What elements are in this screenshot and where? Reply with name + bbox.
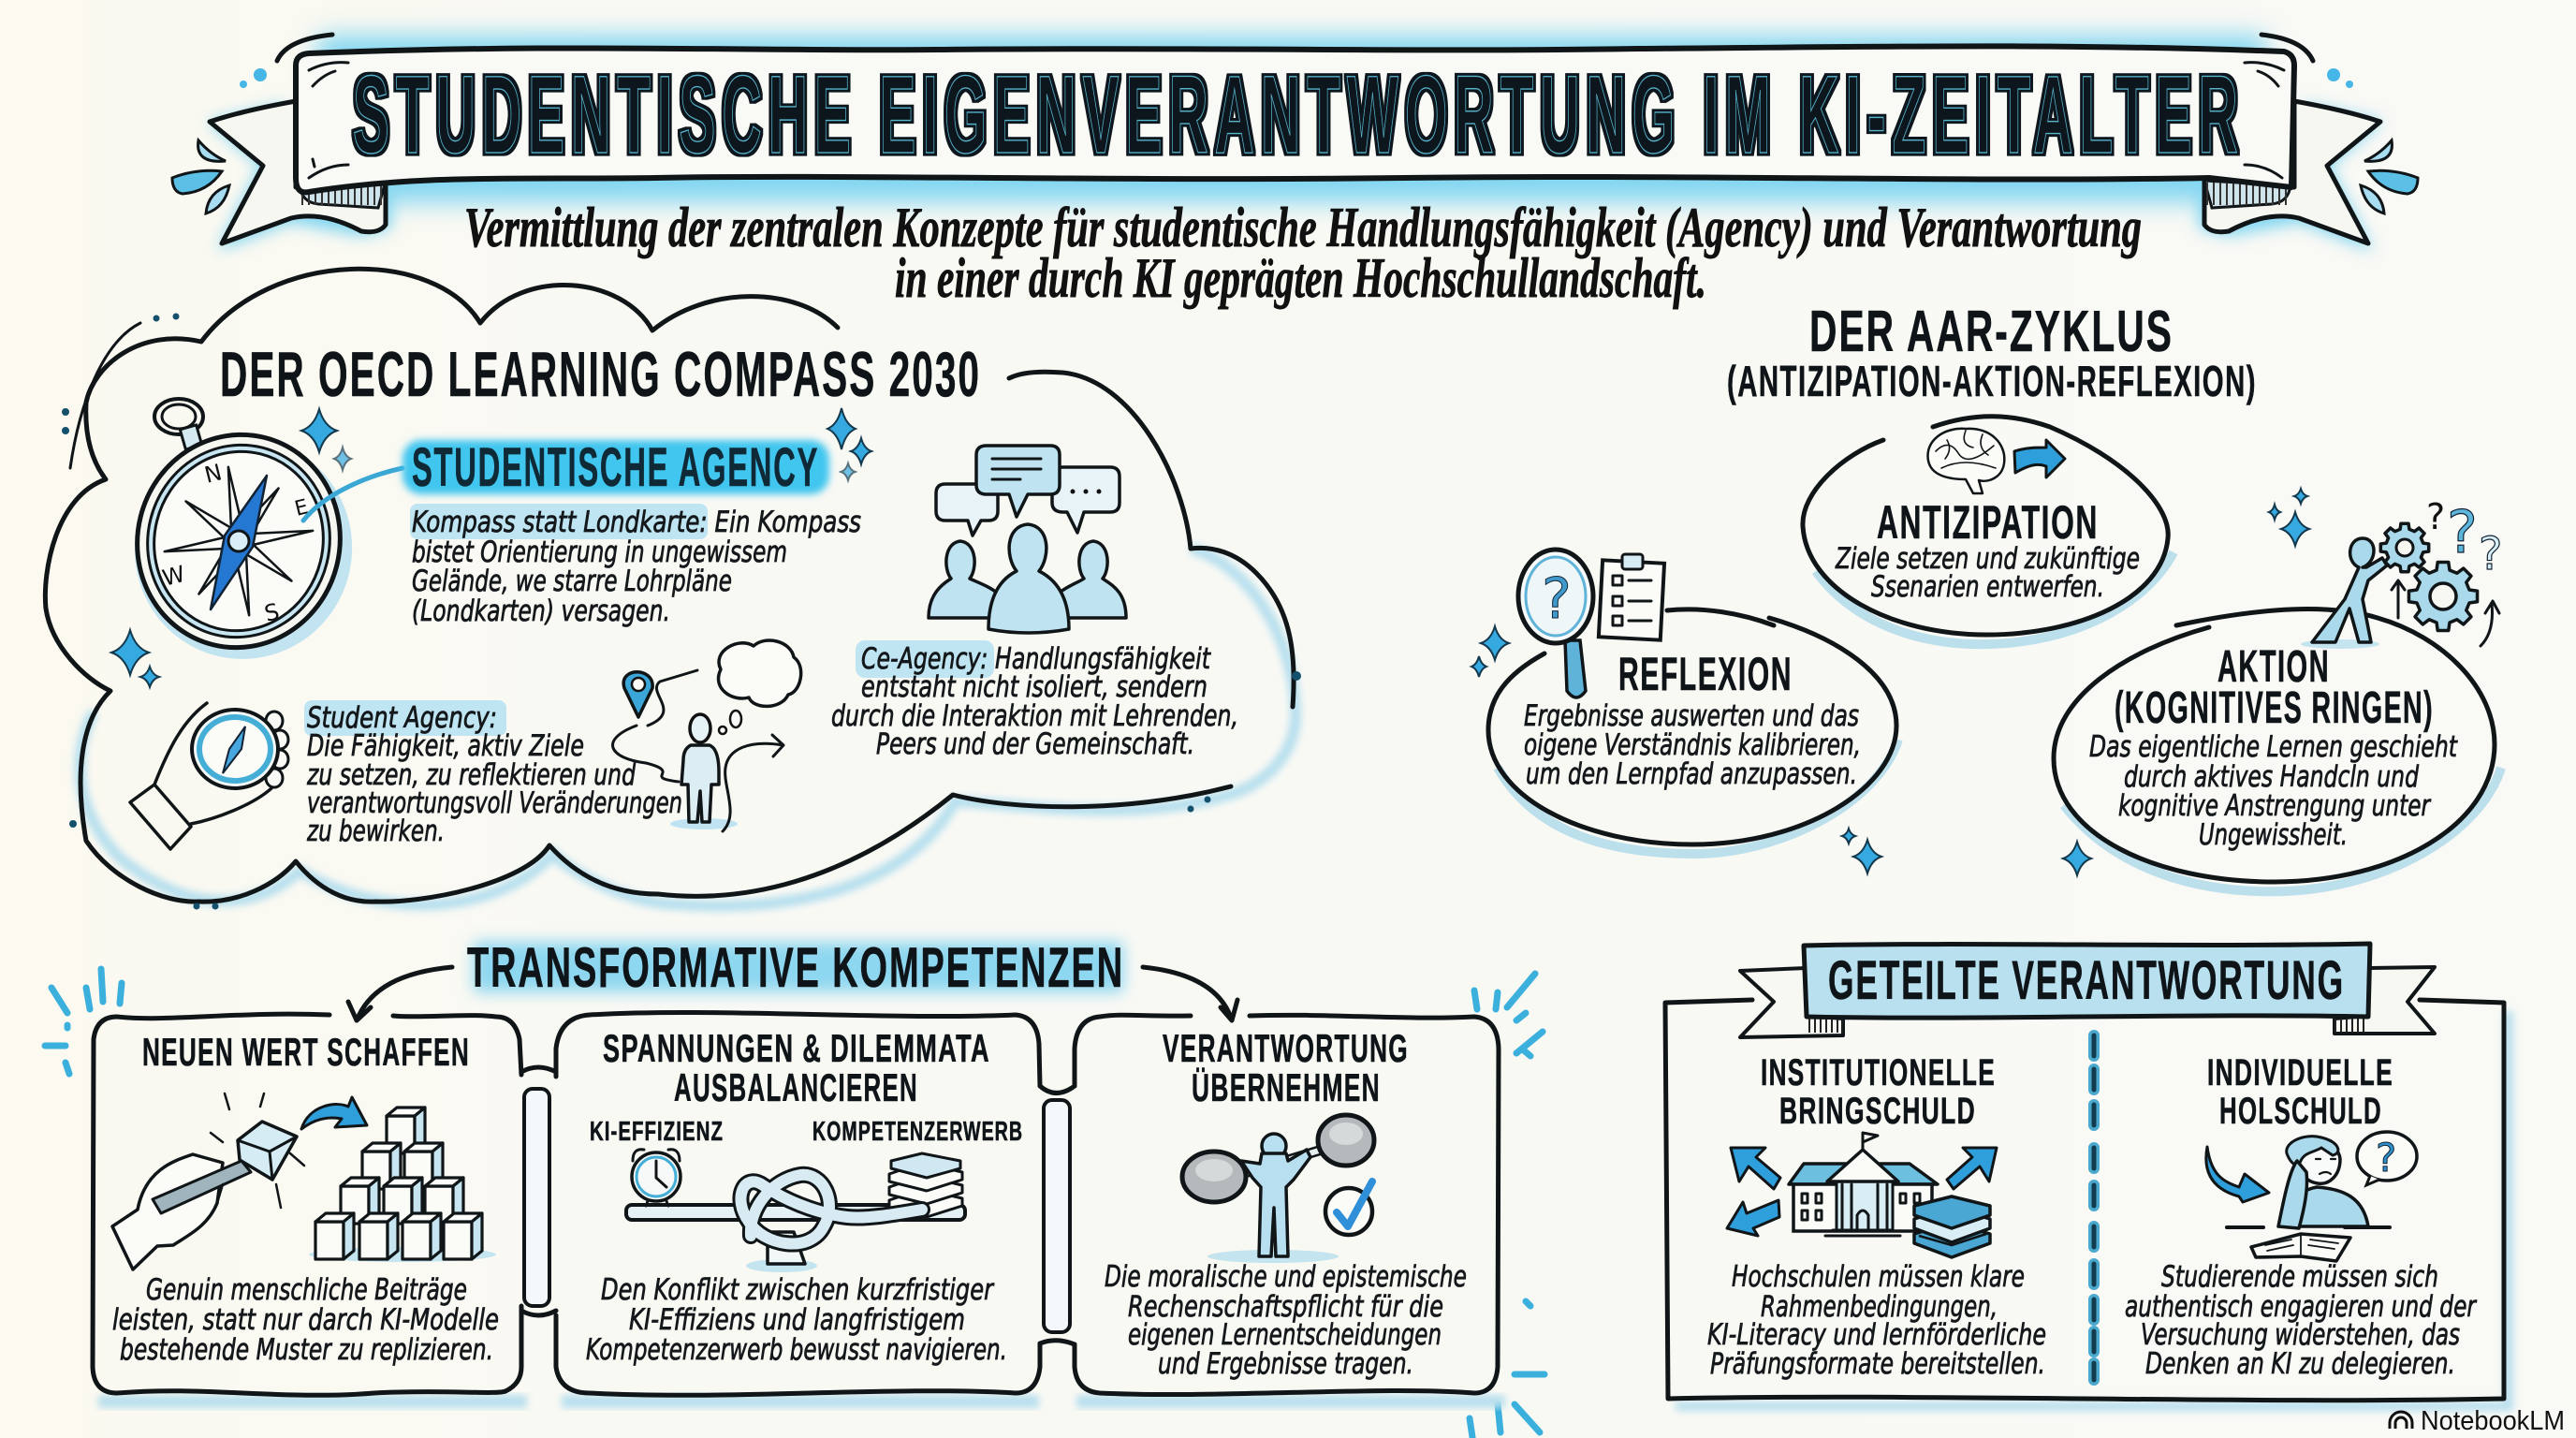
arrow: to first competence: [348, 967, 452, 1020]
text: Kompass statt Landkarte: (Londkarten) versagen.: [412, 594, 670, 628]
node: Aktion: AKTION: [2217, 642, 2330, 692]
column: Bringschuld: BRINGSCHULD: [1779, 1091, 1976, 1132]
text: Student Agency: zu bewirken.: [306, 814, 445, 848]
node: Reflexion: um den Lernpfad anzupassen.: [1526, 757, 1857, 791]
decorative dots: [62, 313, 1301, 910]
text: Kompass statt Landkarte: Kompass statt Londkarte: Ein Kompass: [412, 506, 861, 539]
column: Bringschuld: Präfungsformate bereitstellen.: [1710, 1347, 2045, 1381]
card: Verantwortung übernehmen: Die moralische und epistemische: [1105, 1260, 1467, 1294]
panel: shared responsibility: [1665, 944, 2509, 1406]
node: Antizipation: [1803, 417, 2174, 644]
icon: scale with knot, clock and books: [626, 1150, 965, 1272]
card: Verantwortung übernehmen: VERANTWORTUNG: [1163, 1026, 1409, 1070]
icon: figure pushing gears: ?: [2479, 528, 2502, 580]
column: Holschuld: Denken an KI zu delegieren.: [2145, 1347, 2455, 1381]
icon: person with pin and thought cloud: [613, 640, 801, 831]
banner fold strokes: [309, 63, 2284, 178]
icon: hand, cube and stacked blocks: [112, 1093, 496, 1269]
icon: brain with arrow: [1928, 429, 2065, 493]
icon: figure pushing gears: ?: [2447, 498, 2478, 566]
icon: compass: N: [202, 459, 225, 489]
subtitle: [464, 197, 2142, 309]
heading: transformative: TRANSFORMATIVE KOMPETENZEN: [467, 936, 1124, 999]
text: Kompass statt Landkarte: Gelände, we starre Lohrpläne: [412, 565, 732, 598]
text: Kompass statt Landkarte: [410, 504, 861, 628]
card: Spannungen und Dilemmata: [521, 1012, 1075, 1408]
heading: AAR cycle: DER AAR-ZYKLUS: [1809, 300, 2174, 364]
card: neuen Wert schaffen: leisten, statt nur darch KI-Modelle: [112, 1303, 499, 1337]
cloud outline: [45, 269, 1231, 902]
icon: university with arrows and books: [1727, 1133, 1997, 1257]
node: Aktion: [2054, 496, 2502, 891]
column: Bringschuld: [1707, 1052, 2046, 1381]
node: Aktion: kognitive Anstrengung unter: [2118, 789, 2432, 823]
icon: compass: [111, 399, 375, 682]
ribbon heading: [1740, 944, 2435, 1037]
sparkles around cycle: [1471, 489, 2309, 875]
text: Co-Agency: Ce-Agency: Handlungsfähigkeit: [861, 642, 1211, 676]
column: Bringschuld: INSTITUTIONELLE: [1761, 1052, 1996, 1093]
connector line to highlight: [303, 468, 402, 521]
node: Antizipation: Ziele setzen und zukünftige: [1835, 542, 2140, 576]
card: Verantwortung übernehmen: und Ergebnisse tragen.: [1158, 1347, 1413, 1381]
arrow: to third competence: [1143, 967, 1237, 1020]
title banner: [172, 35, 2418, 251]
icon: weightlifter and checkmark: [1182, 1115, 1374, 1263]
column: Holschuld: INDIVIDUELLE: [2207, 1052, 2393, 1093]
panel: AAR cycle: [1471, 300, 2502, 891]
highlight: Studentische Agency: [402, 437, 829, 498]
node: Aktion: Ungewissheit.: [2199, 818, 2348, 852]
card: Spannungen und Dilemmata: SPANNUNGEN & DILEMMATA: [603, 1026, 990, 1070]
divider: [2088, 1035, 2100, 1380]
text: Co-Agency: entstaht nicht isoliert, sendern: [861, 670, 1208, 704]
node: Reflexion: Ergebnisse auswerten und das: [1524, 699, 1859, 733]
node: Antizipation: ANTIZIPATION: [1877, 496, 2099, 549]
heading: AAR cycle: [1727, 300, 2257, 405]
icon: hand holding compass: [130, 703, 288, 849]
card: Spannungen und Dilemmata: KI-EFFIZIENZ: [590, 1117, 724, 1147]
tube connectors: [524, 1089, 1070, 1332]
icon: student reading: ?: [2376, 1135, 2396, 1181]
text: Co-Agency: [831, 640, 1238, 761]
node: Antizipation: Ssenarien entwerfen.: [1871, 570, 2104, 604]
card: Verantwortung übernehmen: eigenen Lernentscheidungen: [1128, 1318, 1442, 1352]
icon: compass: E: [292, 495, 311, 521]
card: Verantwortung übernehmen: [1075, 1015, 1505, 1408]
text: Kompass statt Landkarte: bistet Orientierung in ungewissem: [412, 536, 787, 569]
heading: OECD compass: DER OECD LEARNING COMPASS 2030: [220, 339, 981, 410]
node: Aktion: Das eigentliche Lernen geschieht: [2089, 730, 2458, 764]
column: Holschuld: [2125, 1052, 2478, 1381]
text: Student Agency: verantwortungsvoll Veränderungen: [307, 786, 682, 820]
right ribbon tail: [2204, 35, 2418, 243]
text: Student Agency: Die Fähigkeit, aktiv Ziele: [307, 729, 584, 763]
node: Reflexion: [1488, 550, 1898, 854]
cloud shadow: [80, 549, 1295, 906]
column: Holschuld: Versuchung widerstehen, das: [2141, 1318, 2460, 1352]
divider core: [2091, 1035, 2097, 1380]
column: Holschuld: Studierende müssen sich: [2161, 1260, 2438, 1294]
text: Student Agency: zu setzen, zu reflektieren und: [306, 758, 636, 792]
icon: student reading: [2206, 1132, 2417, 1261]
panel: OECD learning compass cloud: [45, 269, 1301, 909]
icon: mirror and clipboard: ?: [1542, 566, 1572, 632]
card: Spannungen und Dilemmata: KI-Effiziens und langfristigem: [629, 1303, 965, 1337]
card: Verantwortung übernehmen: ÜBERNEHMEN: [1192, 1065, 1381, 1109]
banner body: [296, 46, 2294, 192]
icon: figure pushing gears: ?: [2426, 496, 2445, 537]
heading: transformative: [467, 936, 1124, 999]
sparkles around compass: [111, 408, 871, 687]
card: Verantwortung übernehmen: Rechenschaftspflicht für die: [1128, 1290, 1443, 1324]
column: Bringschuld: Rahmenbedingungen,: [1761, 1290, 1998, 1324]
icon: compass: S: [262, 598, 282, 627]
card: neuen Wert schaffen: Genuin menschliche Beiträge: [146, 1273, 467, 1307]
left ribbon tail: [172, 35, 386, 243]
icon: co-agency group: [929, 446, 1126, 633]
icon: mirror and clipboard: [1518, 550, 1664, 697]
node: Aktion: durch aktives Handcln und: [2124, 760, 2419, 794]
burst marks: [45, 969, 1544, 1437]
card: neuen Wert schaffen: [93, 1014, 527, 1408]
text: Co-Agency: Peers und der Gemeinschaft.: [876, 727, 1194, 761]
text: Student Agency: Student Agency:: [307, 701, 497, 735]
node: Reflexion: REFLEXION: [1618, 648, 1793, 700]
NotebookLM watermark: NotebookLM: [2421, 1406, 2565, 1436]
column: Holschuld: HOLSCHULD: [2219, 1091, 2382, 1132]
text: Student Agency: [304, 700, 682, 848]
icon: compass: W: [160, 561, 187, 592]
card: Spannungen und Dilemmata: Den Konflikt zwischen kurzfristiger: [601, 1273, 995, 1307]
column: Bringschuld: KI-Literacy und lernförderliche: [1707, 1318, 2046, 1352]
card: neuen Wert schaffen: NEUEN WERT SCHAFFEN: [142, 1030, 470, 1074]
subtitle: in einer durch KI geprägten Hochschullandschaft.: [895, 247, 1706, 309]
panel: transformative competencies: [45, 936, 1544, 1437]
icon: figure pushing gears: [2301, 496, 2502, 649]
frame: [1665, 1000, 2509, 1406]
text: Co-Agency: durch die Interaktion mit Lehrenden,: [831, 699, 1238, 733]
card: Spannungen und Dilemmata: Kompetenzerwerb bewusst navigieren.: [586, 1333, 1007, 1367]
highlight: Studentische Agency: STUDENTISCHE AGENCY: [412, 437, 819, 498]
card: Spannungen und Dilemmata: AUSBALANCIEREN: [674, 1065, 918, 1109]
heading: AAR cycle: (ANTIZIPATION-AKTION-REFLEXION): [1727, 357, 2257, 405]
column: Bringschuld: Hochschulen müssen klare: [1732, 1260, 2025, 1294]
card: Spannungen und Dilemmata: KOMPETENZERWERB: [812, 1117, 1023, 1147]
card: neuen Wert schaffen: bestehende Muster zu replizieren.: [120, 1333, 493, 1367]
banner glow: [318, 36, 2265, 202]
node: Reflexion: oigene Verständnis kalibrieren,: [1524, 728, 1861, 762]
